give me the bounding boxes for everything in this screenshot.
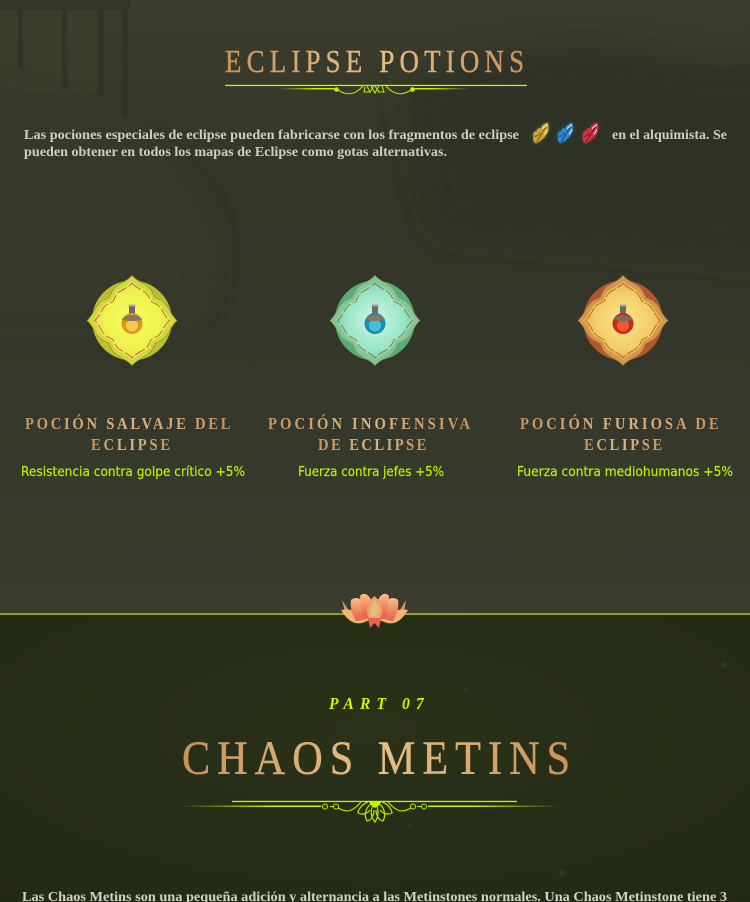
intro paragraph: pueden obtener en todos los mapas de Eclipse como gotas alternativas. — [24, 145, 447, 160]
potion badge: green — [330, 276, 420, 366]
potion 1 effect: Resistencia contra golpe crítico +5% — [21, 464, 245, 480]
background: lower section — [0, 614, 750, 902]
heading: Chaos Metins: CHAOS METINS — [182, 732, 570, 785]
potion 2 name — [268, 413, 471, 454]
potion badge: red — [578, 276, 668, 366]
potion 1 name: ECLIPSE — [91, 436, 170, 454]
potion 3 name: ECLIPSE — [584, 436, 662, 454]
potion 3 name: POCIÓN FURIOSA DE — [520, 413, 719, 433]
potion 2 name: POCIÓN INOFENSIVA — [268, 413, 471, 433]
potion 2 effect: Fuerza contra jefes +5% — [298, 464, 444, 480]
section divider line — [0, 613, 750, 615]
icon: lotus flower divider — [341, 594, 408, 628]
potion 2 name: DE ECLIPSE — [318, 436, 426, 454]
intro paragraph — [24, 128, 727, 160]
potion 3 name — [520, 413, 719, 454]
icon: blue flask — [364, 304, 386, 334]
title: Eclipse Potions: ECLIPSE POTIONS — [225, 45, 524, 80]
title ornament — [225, 85, 527, 94]
background: upper section — [0, 0, 750, 614]
icon: red flask — [612, 304, 634, 334]
potion 1 name — [25, 413, 231, 454]
section label: Part 07: PART 07 — [328, 693, 425, 713]
icon: yellow eclipse shard — [533, 122, 549, 144]
dust specks — [407, 663, 726, 875]
icon: blue eclipse shard — [558, 122, 573, 144]
icon: red eclipse shard — [583, 122, 598, 144]
potion badge: yellow — [87, 276, 177, 366]
intro paragraph: en el alquimista. Se — [612, 128, 727, 143]
potion 1 name: POCIÓN SALVAJE DEL — [25, 413, 231, 433]
intro paragraph: Las pociones especiales de eclipse pueden fabricarse con los fragmentos de eclipse — [24, 128, 519, 143]
heading ornament — [180, 801, 560, 822]
icon: yellow flask — [122, 304, 142, 334]
potion 3 effect: Fuerza contra mediohumanos +5% — [517, 464, 733, 480]
